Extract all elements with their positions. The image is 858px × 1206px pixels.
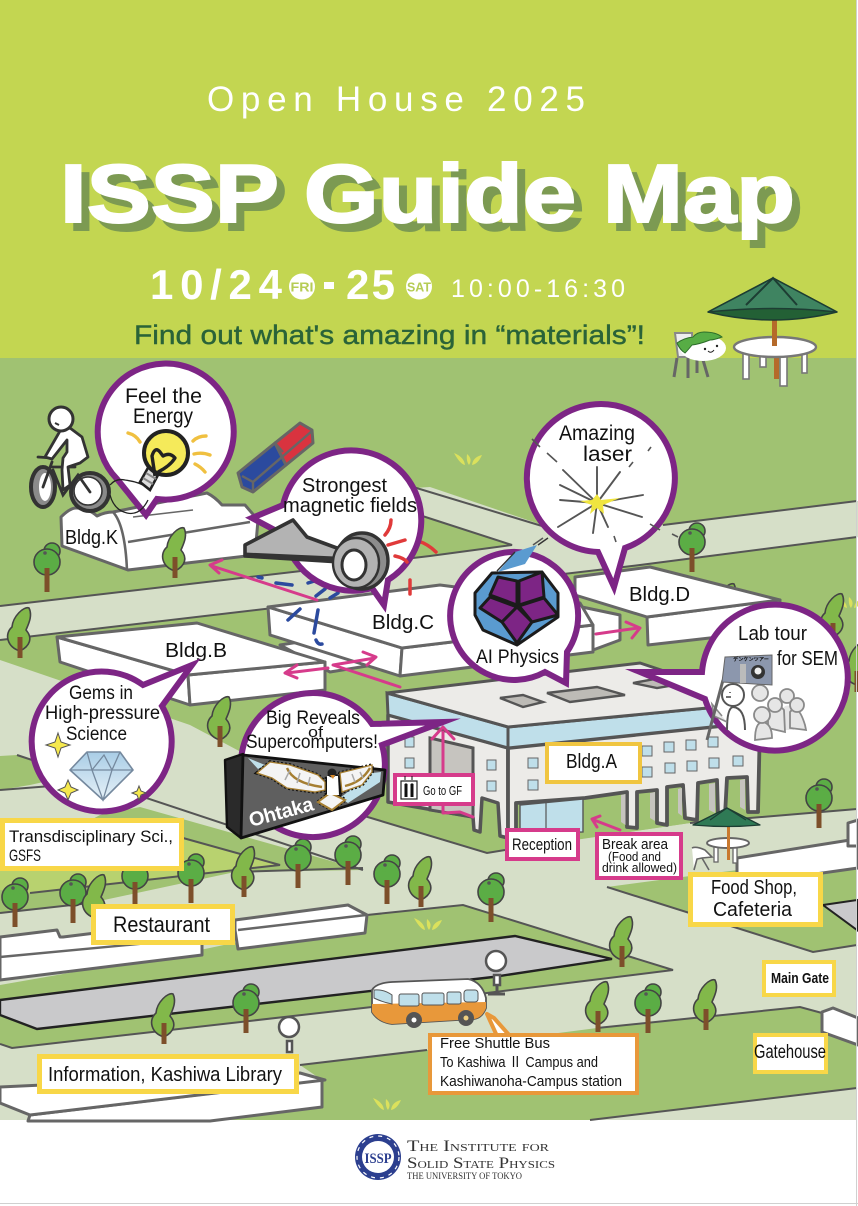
cafe umbrella and table [692,808,760,870]
label: go to GF: Go to GF [423,783,462,798]
bubble: feel the energy [98,364,234,515]
logo emblem: ISSP [364,1151,392,1167]
building D: Bldg.D [629,584,690,606]
label: food shop, cafeteria: Cafeteria [713,899,793,921]
building K: Bldg.K [65,527,119,549]
bubble: gems: High-pressure [45,703,160,724]
label: break area: Break area [602,836,669,853]
date and time [150,261,625,308]
icon: elevator [401,776,417,799]
tree near building B [208,697,231,747]
head [49,407,73,431]
title: ISSP Guide Map: ISSP Guide Map [60,147,795,240]
left wall [388,715,508,838]
label: break area: (Food and [608,849,661,864]
building B: Bldg.B [165,640,227,662]
building K [61,493,258,570]
label: reception [507,830,578,859]
skylights [500,679,675,707]
label: free shuttle bus [430,1014,637,1093]
grass tufts [373,453,858,1110]
icon: spanner magnet [245,520,388,589]
logo emblem [355,1134,401,1180]
label: transdisciplinary [2,820,182,868]
pink route arrows [210,560,640,687]
logo text: The Institute for [407,1138,550,1155]
red magnetic field dashes [410,541,436,594]
mascot on chair [674,332,726,378]
icon: diamond [70,752,133,800]
bubble: strongest magnetic fields: magnetic fields [283,495,417,517]
label: reception: Reception [512,835,572,854]
bubble: amazing laser [527,404,678,587]
icon: sparkles [46,733,146,800]
entrance recess [430,738,473,817]
bubble: feel the energy: Energy [133,405,193,428]
bubble: AI physics: AI Physics [476,647,559,668]
supercomputer Ohtaka: Ohtaka [247,793,317,832]
building C [268,585,593,676]
building A [387,663,760,838]
green patches [0,755,75,790]
bicycle rider [31,407,109,511]
logo text: THE UNIVERSITY OF TOKYO [407,1171,522,1181]
tree at building K [163,528,186,578]
logo text: Solid State Physics [407,1155,555,1172]
bubble: big reveals of supercomputers: Supercomputers! [246,732,378,753]
icon: light bulb [128,431,210,490]
label: information, kashiwa library: Information, Kashiwa Library [48,1064,282,1086]
label: free shuttle bus: To Kashiwa Ⅱ Campus and [440,1054,598,1071]
header umbrella and table [708,278,837,386]
title: open house: Open House 2025 [207,80,585,119]
flag [722,655,772,685]
label: go to GF [395,775,473,804]
building D [575,567,780,650]
label: gatehouse [754,1035,826,1072]
building C: Bldg.C [372,612,434,634]
roof [387,663,760,727]
label: free shuttle bus: Free Shuttle Bus [440,1035,550,1052]
bubble: big reveals of supercomputers [241,693,443,837]
date and time: 25 [346,261,395,308]
food shop building [737,820,858,885]
canopy [708,278,837,320]
bubble: lab tour for SEM [640,605,848,751]
bubble: amazing laser: Amazing [559,422,635,445]
flag: デンケンツアー [733,656,769,663]
icon: bar magnet [238,423,313,492]
bubble: big reveals of supercomputers: of [308,724,324,741]
label: transdisciplinary: GSFS [9,846,41,865]
icon: laser star [532,439,678,545]
glass entrance [520,799,583,834]
title: ISSP Guide Map: ISSP Guide Map [68,155,803,248]
header band [0,0,857,358]
map ground [0,358,858,1120]
gatehouse building [822,1008,858,1045]
blue band [387,693,760,748]
icon: quasicrystal [475,545,558,645]
label: restaurant [94,906,232,942]
inner arch shading [621,779,745,825]
label: break area [597,834,681,878]
bubble: amazing laser: laser [583,443,632,466]
logo text [407,1138,555,1181]
trees row [2,779,832,1044]
windows [405,737,743,791]
label: food shop, cafeteria [690,874,820,924]
body [45,428,88,490]
right wall with arches [508,722,760,836]
table [734,337,816,386]
bubble: gems: Science [66,724,127,745]
library building [0,1073,325,1121]
building B [57,623,325,705]
label: free shuttle bus: Kashiwanoha-Campus station [440,1073,622,1090]
bubble: big reveals of supercomputers: Big Reveals [266,708,360,729]
frame [38,457,90,495]
break area arrow [592,816,620,830]
pole [772,305,777,346]
bubble: AI physics [450,538,578,683]
date and time: 10:00-16:30 [451,275,625,303]
label: food shop, cafeteria: Food Shop, [711,877,797,899]
road band [0,487,858,640]
label: gatehouse: Gatehouse [754,1042,826,1063]
elevator route arrow [432,727,473,817]
restaurant annex building [235,905,367,949]
bus stop signs [279,951,506,1052]
label: building A: Bldg.A [566,751,618,773]
red dashes over spanner bubble [385,520,407,562]
shuttle bus [372,979,486,1028]
label: building A [547,744,640,782]
flag pole [707,680,723,740]
bubble: gems: Gems in [69,683,133,704]
label: information, kashiwa library [40,1056,296,1092]
label: restaurant: Restaurant [113,912,210,937]
label: main gate [764,962,834,995]
blue magnetic field dashes [258,577,338,644]
footer logo [355,1134,555,1181]
bubble: lab tour for SEM: Lab tour [738,623,807,645]
tagline: Find out what's amazing in “materials”! [134,320,645,350]
date and time: 10/24 [150,261,283,308]
crowd [752,685,806,740]
date and time: SAT [407,280,431,294]
label: break area: drink allowed) [602,860,677,875]
bubble: feel the energy: Feel the [125,385,202,408]
wheels [31,467,55,507]
bubble: gems [32,665,192,811]
trees behind buildings [8,523,858,692]
date and time: FRI [290,280,314,294]
guide person [712,684,745,730]
bubble: strongest magnetic fields [252,450,421,605]
label: transdisciplinary: Transdisciplinary Sci., [9,827,173,846]
bubble: strongest magnetic fields: Strongest [302,475,387,497]
bike cable [110,480,148,513]
hawk [257,762,372,810]
label: main gate: Main Gate [771,970,829,987]
bubble: lab tour for SEM: for SEM [777,648,838,670]
supercomputer Ohtaka [225,754,385,838]
lower-left long building [0,920,202,980]
